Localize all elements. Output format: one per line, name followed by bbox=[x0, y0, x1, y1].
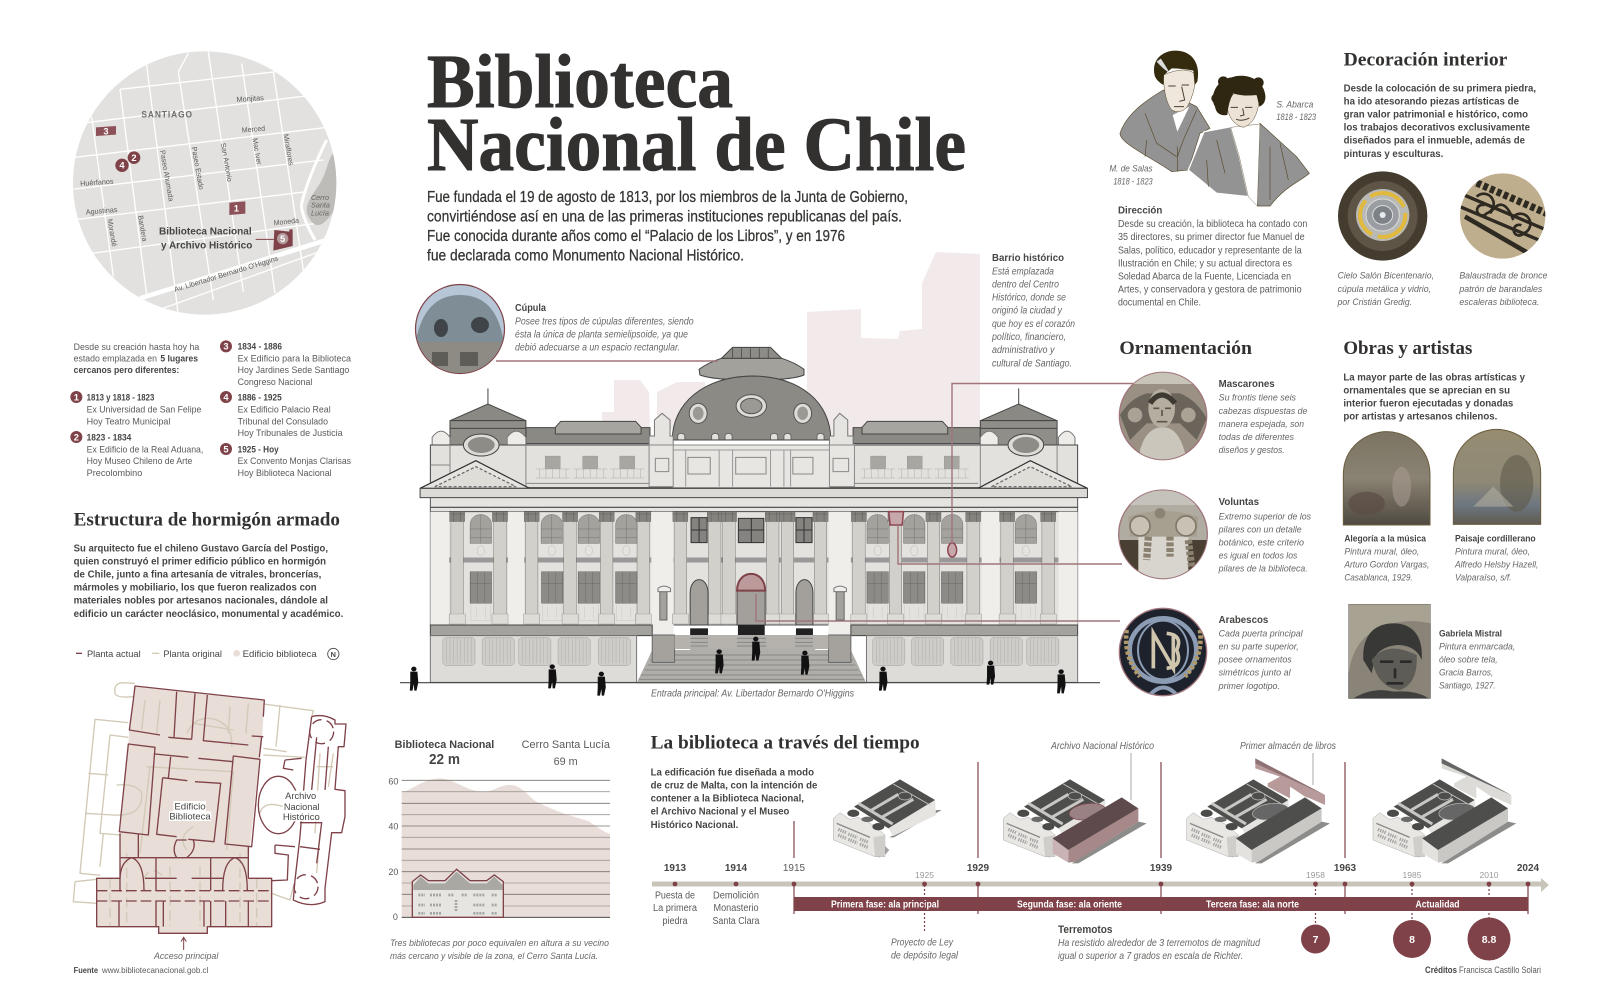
chart note: Tres bibliotecas por poco equivalen en altura a su vecino bbox=[390, 938, 609, 948]
credits: Francisca Castillo Solari bbox=[1459, 965, 1541, 975]
timeline phase bar: Tercera fase: ala norte bbox=[1206, 898, 1299, 910]
source: Fuente bbox=[74, 965, 98, 975]
caption: gabriela mistral: Gracia Barros, bbox=[1439, 667, 1493, 677]
legend: Planta actual bbox=[87, 649, 141, 659]
background skyline bbox=[602, 252, 980, 440]
chart header: Cerro Santa Lucía bbox=[522, 739, 610, 751]
legend: N bbox=[331, 650, 336, 659]
timeline years: 1914 bbox=[725, 863, 748, 874]
text: direccion: documental en Chile. bbox=[1118, 298, 1201, 309]
map streets bbox=[67, 52, 337, 317]
location 4: Ex Edificio Palacio Real bbox=[238, 405, 331, 415]
caption: alegoria: Arturo Gordon Vargas, bbox=[1343, 560, 1429, 570]
stage 1 bbox=[833, 779, 942, 857]
portrait labels: M. de Salas bbox=[1109, 164, 1153, 174]
caption: entrada principal: Entrada principal: Av. Libertador Bernardo O'Higgins bbox=[651, 688, 854, 700]
location 4: Tribunal del Consulado bbox=[238, 417, 328, 427]
map street names: Lucía bbox=[311, 209, 329, 218]
timeline years bbox=[664, 863, 1540, 880]
caption: gabriela mistral bbox=[1439, 628, 1515, 691]
location 4: 4 bbox=[223, 392, 229, 402]
text: voluntas bbox=[1218, 497, 1311, 574]
text: voluntas: Extremo superior de los bbox=[1219, 511, 1311, 521]
map markers: 5 bbox=[280, 234, 285, 244]
caption: alegoria: Casablanca, 1929. bbox=[1344, 573, 1413, 583]
plan labels: Biblioteca bbox=[169, 811, 211, 821]
people bbox=[400, 637, 1100, 696]
panel: height chart bbox=[388, 732, 920, 961]
locations list: 5 lugares bbox=[160, 354, 198, 364]
intro text: convirtiéndose así en una de las primeras instituciones republicanas del país. bbox=[427, 208, 902, 226]
pediments and cornice bbox=[420, 461, 1087, 512]
timeline years: 1929 bbox=[967, 863, 990, 874]
caption: paisaje: Paisaje cordillerano bbox=[1455, 534, 1536, 544]
main floor bbox=[430, 512, 1078, 635]
text: direccion: Soledad Abarca de la Fuente, Licenciada en bbox=[1118, 272, 1291, 283]
map street names: Mac Iver bbox=[250, 137, 264, 166]
portrait labels: S. Abarca bbox=[1276, 99, 1313, 109]
timeline years: 1985 bbox=[1403, 870, 1422, 880]
dome bbox=[672, 347, 831, 440]
location 3: Congreso Nacional bbox=[238, 377, 312, 387]
legend bbox=[76, 648, 339, 660]
map street names: Moneda bbox=[273, 216, 300, 227]
map street names: Santa bbox=[311, 201, 330, 210]
timeline events: Santa Clara bbox=[712, 916, 760, 927]
captions: decoracion: escaleras biblioteca. bbox=[1459, 297, 1539, 307]
location 5: Ex Convento Monjas Clarisas bbox=[238, 456, 351, 466]
note: proyecto de ley: Proyecto de Ley bbox=[891, 938, 954, 948]
image: stained glass bbox=[1338, 171, 1427, 261]
panel: estructura bbox=[73, 509, 346, 975]
callout: cupula bbox=[515, 302, 694, 354]
chart note: más cercano y visible de la zona, el Cerro Santa Lucía. bbox=[390, 951, 598, 961]
text: mascarones: cabezas dispuestas de bbox=[1219, 406, 1307, 416]
heading: ornamentacion: Ornamentación bbox=[1119, 338, 1253, 359]
map street names: Av. Libertador Bernardo O'Higgins bbox=[173, 254, 279, 294]
text: arabescos: Arabescos bbox=[1219, 615, 1268, 626]
image: mascarones bbox=[1118, 372, 1208, 460]
text: direccion: Artes, y conservadora y gestora de patrimonio bbox=[1118, 285, 1302, 296]
intro text: fue declarada como Monumento Nacional Histórico. bbox=[427, 248, 744, 264]
timeline intro: Histórico Nacional. bbox=[651, 820, 739, 831]
caption: gabriela mistral: óleo sobre tela, bbox=[1439, 654, 1498, 664]
map callout: Biblioteca Nacional bbox=[159, 226, 252, 237]
captions: decoracion: Cielo Salón Bicentenario, bbox=[1338, 271, 1434, 281]
location 1 bbox=[70, 391, 201, 427]
chart axis labels bbox=[388, 776, 398, 922]
location 2: 2 bbox=[74, 432, 79, 442]
plan labels: Histórico bbox=[283, 812, 320, 822]
mini building bbox=[412, 869, 503, 917]
map markers bbox=[96, 126, 293, 251]
timeline intro: el Archivo Nacional y el Museo bbox=[651, 807, 789, 818]
text: arabescos: posee ornamentos bbox=[1218, 655, 1292, 665]
note: terremotos: Ha resistido alrededor de 3 terremotos de magnitud bbox=[1058, 938, 1260, 949]
text: mascarones bbox=[1219, 379, 1307, 455]
source: www.bibliotecanacional.gob.cl bbox=[101, 965, 208, 975]
map street names bbox=[80, 93, 330, 294]
note: proyecto de ley bbox=[891, 938, 959, 962]
timeline phase bar bbox=[794, 897, 1528, 911]
caption: gabriela mistral: Santiago, 1927. bbox=[1439, 681, 1496, 691]
text: obras y artistas bbox=[1343, 372, 1525, 422]
floor plan bbox=[73, 683, 346, 933]
current plan lines bbox=[97, 686, 346, 933]
plinth and base bbox=[430, 625, 1078, 683]
timeline axis bbox=[652, 878, 1549, 892]
map street names: Bandera bbox=[136, 215, 150, 243]
location 3 bbox=[220, 340, 352, 387]
text: direccion: 35 directores, su primer director fue Manuel de bbox=[1118, 232, 1305, 243]
chart axis labels: 0 bbox=[393, 912, 398, 922]
timeline phase bar: Primera fase: ala principal bbox=[831, 898, 939, 910]
captions: decoracion: Balaustrada de bronce bbox=[1459, 271, 1547, 281]
text: direccion: Salas, político, educador y representante de la bbox=[1118, 245, 1302, 256]
text: arabescos: simétricos junto al bbox=[1219, 668, 1292, 678]
plan labels: Edificio bbox=[174, 801, 206, 811]
portrait labels bbox=[1109, 99, 1317, 186]
text: decoracion interior bbox=[1344, 83, 1536, 160]
timeline years: 1915 bbox=[783, 863, 806, 874]
credits bbox=[1425, 965, 1541, 975]
callout: barrio historico: cultural de Santiago. bbox=[992, 358, 1072, 370]
portrait labels: 1818 - 1823 bbox=[1276, 112, 1317, 122]
image: balustrade bbox=[1460, 173, 1547, 260]
arrow: acceso principal bbox=[181, 937, 186, 950]
label: primer almacen de libros: Primer almacén de libros bbox=[1240, 741, 1336, 752]
map street names: Morandé bbox=[105, 218, 119, 247]
location 2 bbox=[70, 431, 203, 478]
location 3: Ex Edificio para la Biblioteca bbox=[238, 354, 352, 364]
chart header: Biblioteca Nacional bbox=[395, 739, 494, 751]
text: estructura bbox=[74, 544, 344, 620]
timeline events: piedra bbox=[662, 916, 688, 927]
chart axis labels: 60 bbox=[388, 776, 398, 786]
caption: paisaje: Valparaíso, s/f. bbox=[1455, 573, 1512, 583]
doors bbox=[690, 574, 813, 635]
credits: Créditos bbox=[1425, 965, 1457, 975]
location 5: 1925 - Hoy bbox=[238, 444, 279, 454]
panel: top right bbox=[1109, 50, 1547, 309]
timeline phase bar: Segunda fase: ala oriente bbox=[1017, 898, 1122, 910]
location 4 bbox=[220, 391, 343, 438]
callout lines bbox=[496, 361, 1133, 621]
image: cupula bbox=[416, 284, 506, 380]
intro text: Fue fundada el 19 de agosto de 1813, por los miembros de la Junta de Gobierno, bbox=[427, 189, 908, 206]
location 1: Hoy Teatro Municipal bbox=[87, 417, 170, 427]
map label: SANTIAGO bbox=[141, 109, 193, 119]
location 3: Hoy Jardines Sede Santiago bbox=[238, 365, 349, 375]
text: estructura: materiales nobles por artesanos nacionales, dándole al bbox=[74, 596, 328, 607]
chart header bbox=[395, 739, 610, 768]
text: estructura: edificio un carácter neoclásico, monumental y académico. bbox=[74, 609, 344, 620]
timeline intro: de cruz de Malta, con la intención de bbox=[651, 781, 818, 792]
map markers: 3 bbox=[103, 126, 109, 136]
earthquake bubbles: 7 bbox=[1313, 934, 1319, 946]
text: estructura: Su arquitecto fue el chileno Gustavo García del Postigo, bbox=[74, 544, 328, 555]
location 1: 1813 y 1818 - 1823 bbox=[87, 392, 154, 402]
map street names: San Antonio bbox=[219, 142, 234, 182]
timeline events: La primera bbox=[653, 903, 697, 914]
title: Biblioteca bbox=[427, 40, 733, 124]
captions: decoracion bbox=[1337, 271, 1547, 307]
timeline intro: La edificación fue diseñada a modo bbox=[651, 768, 814, 779]
callout: barrio historico: político, financiero, bbox=[991, 332, 1066, 343]
location 5: 5 bbox=[223, 444, 229, 454]
location 2: Ex Edificio de la Real Aduana, bbox=[87, 444, 203, 454]
location 4: 1886 - 1925 bbox=[238, 392, 282, 402]
label: archivo nacional historico: Archivo Nacional Histórico bbox=[1050, 741, 1154, 752]
chart axis labels: 20 bbox=[388, 867, 398, 877]
text: direccion bbox=[1118, 206, 1307, 309]
building illustration bbox=[400, 347, 1100, 696]
map street names: Huérfanos bbox=[80, 177, 114, 188]
map street names: Miraflores bbox=[281, 133, 296, 167]
text: obras y artistas: por artistas y artesanos chilenos. bbox=[1343, 411, 1498, 422]
timeline years: 1958 bbox=[1306, 870, 1325, 880]
locations list: cercanos pero diferentes: bbox=[74, 365, 179, 375]
timeline dots bbox=[673, 882, 1530, 886]
timeline ticks bbox=[794, 762, 1528, 933]
text: mascarones: todas de diferentes bbox=[1219, 432, 1294, 442]
portraits bbox=[1120, 51, 1309, 206]
timeline phase bar: Actualidad bbox=[1416, 898, 1460, 910]
text: mascarones: manera espejada, son bbox=[1219, 419, 1304, 429]
callout: barrio historico: Está emplazada bbox=[992, 266, 1054, 278]
callout: barrio historico bbox=[991, 252, 1075, 370]
location 3: 1834 - 1886 bbox=[238, 342, 282, 352]
captions: decoracion: patrón de barandales bbox=[1458, 284, 1543, 294]
map markers: 2 bbox=[131, 153, 137, 163]
location 5: Hoy Biblioteca Nacional bbox=[238, 468, 332, 478]
caption: gabriela mistral: Gabriela Mistral bbox=[1439, 628, 1502, 638]
chart header: 69 m bbox=[554, 756, 578, 768]
stage 2 bbox=[1003, 779, 1147, 863]
text: arabescos bbox=[1218, 615, 1304, 691]
portrait: Manuel de Salas bbox=[1120, 51, 1210, 172]
map of Santiago bbox=[67, 51, 352, 478]
chart note bbox=[390, 938, 609, 961]
upper floor bbox=[430, 434, 1078, 488]
plan labels: Archivo bbox=[285, 791, 316, 801]
callout: barrio historico: originó la ciudad y bbox=[992, 306, 1063, 316]
captions: decoracion: por Cristián Gredig. bbox=[1337, 297, 1412, 307]
isometric building stages bbox=[833, 758, 1516, 863]
original plan lines bbox=[73, 683, 333, 927]
intro text bbox=[427, 189, 908, 264]
note: terremotos bbox=[1058, 924, 1260, 962]
callout: cupula: Cúpula bbox=[515, 302, 546, 314]
text: obras y artistas: interior fueron ejecutadas y donadas bbox=[1343, 398, 1514, 409]
note: terremotos: Terremotos bbox=[1058, 924, 1112, 936]
caption: gabriela mistral: Pintura enmarcada, bbox=[1439, 641, 1515, 651]
text: mascarones: diseños y gestos. bbox=[1219, 445, 1285, 455]
plan labels bbox=[169, 791, 321, 822]
location 5 bbox=[220, 443, 351, 478]
callout: barrio historico: administrativo y bbox=[992, 345, 1055, 356]
text: mascarones: Su frontis tiene seis bbox=[1219, 393, 1296, 403]
location 1: Ex Universidad de San Felipe bbox=[87, 405, 201, 415]
text: decoracion interior: diseñados para el inmueble, además de bbox=[1344, 136, 1525, 147]
label lines bbox=[1131, 753, 1313, 800]
map callout bbox=[159, 226, 252, 252]
timeline years: 1913 bbox=[664, 863, 687, 874]
plan labels: Nacional bbox=[284, 802, 319, 812]
callout: cupula: Posee tres tipos de cúpulas diferentes, siendo bbox=[515, 316, 694, 328]
map street names: Merced bbox=[241, 124, 265, 135]
timeline intro: contener a la Biblioteca Nacional, bbox=[651, 794, 804, 805]
text: direccion: Desde su creación, la biblioteca ha contado con bbox=[1118, 219, 1307, 230]
text: voluntas: botánico, este criterio bbox=[1219, 538, 1304, 548]
text: obras y artistas: La mayor parte de las obras artísticas y bbox=[1343, 372, 1525, 383]
stage 3 bbox=[1187, 758, 1330, 863]
text: voluntas: es igual en todos los bbox=[1219, 551, 1298, 561]
locations list bbox=[70, 340, 352, 478]
locations list: Desde su creación hasta hoy ha bbox=[74, 342, 200, 352]
location 3: 3 bbox=[223, 342, 229, 352]
label: acceso principal: Acceso principal bbox=[153, 951, 219, 961]
image: voluntas bbox=[1118, 490, 1208, 580]
map street names: Agustinas bbox=[85, 205, 118, 217]
text: arabescos: primer logotipo. bbox=[1218, 681, 1280, 691]
panel: ornamentacion y obras bbox=[1118, 338, 1541, 698]
earthquake bubbles: 8.8 bbox=[1482, 934, 1496, 946]
earthquake bubbles: 8 bbox=[1409, 934, 1415, 946]
timeline intro bbox=[651, 768, 818, 831]
location 2: Hoy Museo Chileno de Arte bbox=[87, 456, 192, 466]
heading: obras y artistas: Obras y artistas bbox=[1343, 338, 1472, 359]
text: voluntas: pilares de la biblioteca. bbox=[1218, 564, 1308, 574]
heading: decoracion interior: Decoración interior bbox=[1344, 50, 1507, 71]
timeline years: 1939 bbox=[1150, 863, 1173, 874]
callout: barrio historico: dentro del Centro bbox=[992, 280, 1059, 290]
callout: barrio historico: Histórico, donde se bbox=[992, 292, 1066, 304]
roofs bbox=[432, 388, 1075, 446]
timeline events: Monasterio bbox=[714, 903, 759, 914]
text: decoracion interior: ha ido atesorando piezas artísticas de bbox=[1344, 96, 1519, 107]
image: arabescos bbox=[1119, 608, 1207, 696]
locations list: estado emplazada en bbox=[74, 354, 157, 364]
text: voluntas: Voluntas bbox=[1219, 497, 1259, 508]
text: decoracion interior: gran valor patrimonial e histórico, como bbox=[1344, 110, 1528, 121]
callout: cupula: debió adecuarse a un espacio rectangular. bbox=[515, 342, 680, 354]
caption: alegoria: Alegoría a la música bbox=[1344, 534, 1427, 544]
callout: cupula: ésta la única de planta semielipsoide, ya que bbox=[515, 330, 688, 340]
hill area bbox=[402, 778, 610, 917]
note: proyecto de ley: de depósito legal bbox=[891, 950, 959, 962]
portrait labels: 1818 - 1823 bbox=[1113, 176, 1153, 186]
callout: barrio historico: que hoy es el corazón bbox=[992, 319, 1075, 330]
map markers: 1 bbox=[234, 203, 239, 213]
map street names: Monjitas bbox=[236, 93, 264, 104]
text: arabescos: en su parte superior, bbox=[1219, 642, 1299, 652]
callout: barrio historico: Barrio histórico bbox=[992, 252, 1064, 264]
location 1: 1 bbox=[74, 392, 79, 402]
timeline events: Puesta de bbox=[655, 890, 695, 902]
text: estructura: quien construyó el primer edificio público en hormigón bbox=[74, 557, 326, 568]
location 2: Precolombino bbox=[87, 468, 142, 478]
text: direccion: Ilustración en Chile; y su actual directora es bbox=[1118, 258, 1292, 269]
timeline events bbox=[653, 890, 760, 927]
image: gabriela mistral portrait bbox=[1349, 604, 1430, 698]
text: decoracion interior: pinturas y esculturas. bbox=[1344, 149, 1444, 160]
legend: Edificio biblioteca bbox=[243, 649, 317, 659]
map callout: y Archivo Histórico bbox=[161, 241, 252, 252]
title: Nacional de Chile bbox=[427, 103, 966, 187]
image: alegoria mural bbox=[1343, 432, 1430, 525]
caption: paisaje bbox=[1454, 534, 1538, 583]
text: direccion: Dirección bbox=[1118, 206, 1162, 217]
timeline years: 1963 bbox=[1334, 863, 1357, 874]
text: estructura: mármoles y mobiliario, los que fueron realizados con bbox=[74, 583, 317, 594]
text: estructura: de Chile, junto a fina artesanía de vitrales, broncerías, bbox=[74, 570, 322, 581]
heading: estructura: Estructura de hormigón armado bbox=[74, 509, 340, 530]
chart header: 22 m bbox=[429, 752, 460, 768]
earthquake bubbles bbox=[1301, 918, 1510, 960]
ornament highlights bbox=[889, 512, 957, 557]
map markers: 4 bbox=[119, 161, 125, 171]
timeline heading: La biblioteca a través del tiempo bbox=[651, 732, 920, 753]
location 2: 1823 - 1834 bbox=[87, 433, 132, 443]
intro text: Fue conocida durante años como el “Palacio de los Libros”, y en 1976 bbox=[427, 228, 845, 245]
timeline years: 1925 bbox=[915, 870, 934, 880]
location 4: Hoy Tribunales de Justicia bbox=[238, 428, 343, 438]
note: terremotos: igual o superior a 7 grados en escala de Richter. bbox=[1058, 951, 1243, 962]
text: mascarones: Mascarones bbox=[1219, 379, 1275, 390]
map street names: Cerro bbox=[311, 193, 329, 202]
chart axis labels: 40 bbox=[388, 821, 398, 831]
text: obras y artistas: ornamentales que se aprecian en su bbox=[1343, 385, 1510, 396]
map street names: Paseo Ahumada bbox=[158, 149, 176, 203]
text: decoracion interior: Desde la colocación de su primera piedra, bbox=[1344, 83, 1536, 94]
caption: paisaje: Pintura mural, óleo, bbox=[1455, 547, 1530, 557]
timeline years: 2010 bbox=[1480, 870, 1499, 880]
text: voluntas: pilares con un detalle bbox=[1218, 525, 1302, 535]
text: arabescos: Cada puerta principal bbox=[1219, 629, 1304, 639]
caption: paisaje: Alfredo Helsby Hazell, bbox=[1454, 560, 1538, 570]
captions: decoracion: cúpula metálica y vidrio, bbox=[1338, 284, 1431, 294]
caption: alegoria: Pintura mural, óleo, bbox=[1344, 547, 1419, 557]
title bbox=[427, 40, 966, 187]
image: paisaje mural bbox=[1453, 429, 1541, 524]
timeline years: 2024 bbox=[1517, 863, 1540, 874]
chart grid bbox=[402, 780, 610, 917]
caption: alegoria bbox=[1343, 534, 1429, 583]
timeline events: Demolición bbox=[713, 890, 759, 902]
portrait: Soledad Abarca bbox=[1188, 76, 1309, 206]
map street names: Paseo Estado bbox=[190, 146, 206, 190]
legend: Planta original bbox=[163, 649, 222, 659]
text: decoracion interior: los trabajos decorativos exclusivamente bbox=[1344, 123, 1530, 134]
stage 4 bbox=[1373, 758, 1516, 863]
